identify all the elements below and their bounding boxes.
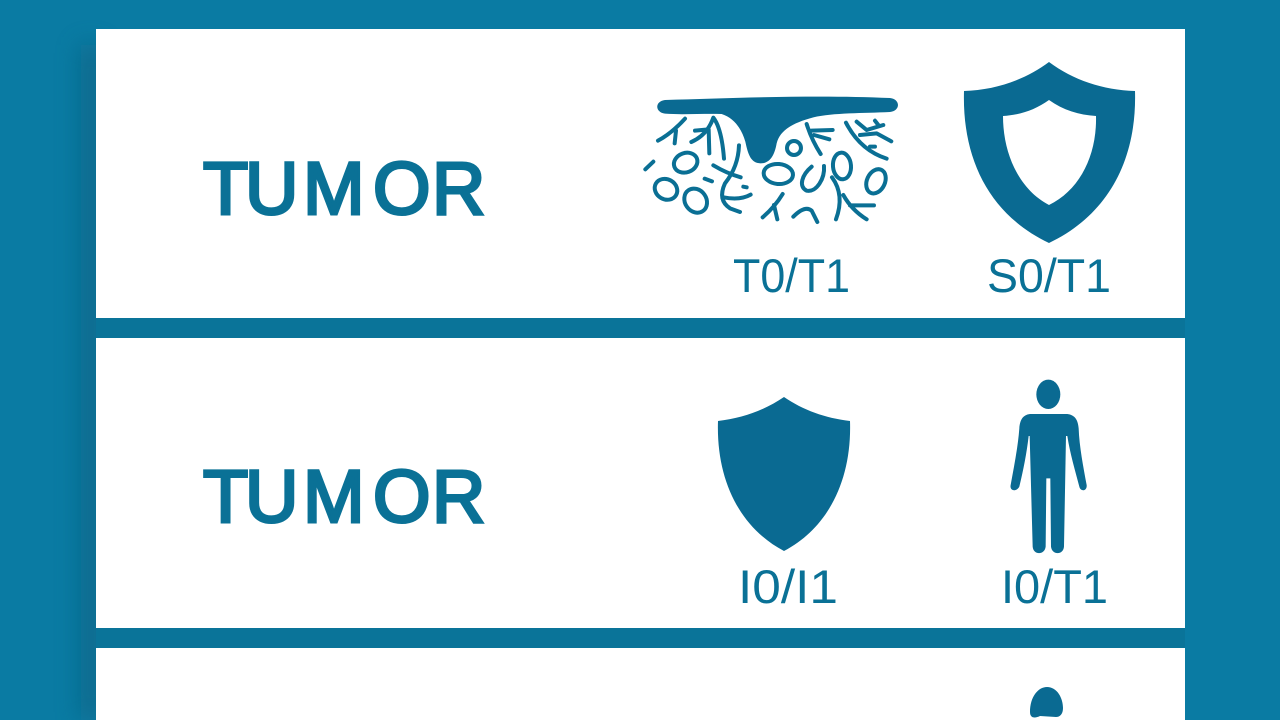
panel: bottom row cropped xyxy=(96,648,1185,720)
icon: tissue with vessels and cells xyxy=(645,97,898,222)
icon: solid shield xyxy=(718,397,850,551)
panel: top tumor row xyxy=(96,29,1185,318)
heading: tumor middle: TUMOR xyxy=(203,455,485,538)
panel: middle tumor row xyxy=(96,338,1185,628)
icon: cropped person head xyxy=(1030,687,1063,717)
icon: person xyxy=(1011,380,1087,553)
icon: outlined shield xyxy=(964,62,1135,243)
heading: tumor top: TUMOR xyxy=(203,147,485,230)
label: T0/T1: T0/T1 xyxy=(733,249,850,302)
label: I0/T1: I0/T1 xyxy=(1001,560,1108,613)
label: S0/T1: S0/T1 xyxy=(987,249,1111,302)
label: I0/I1: I0/I1 xyxy=(738,560,838,613)
